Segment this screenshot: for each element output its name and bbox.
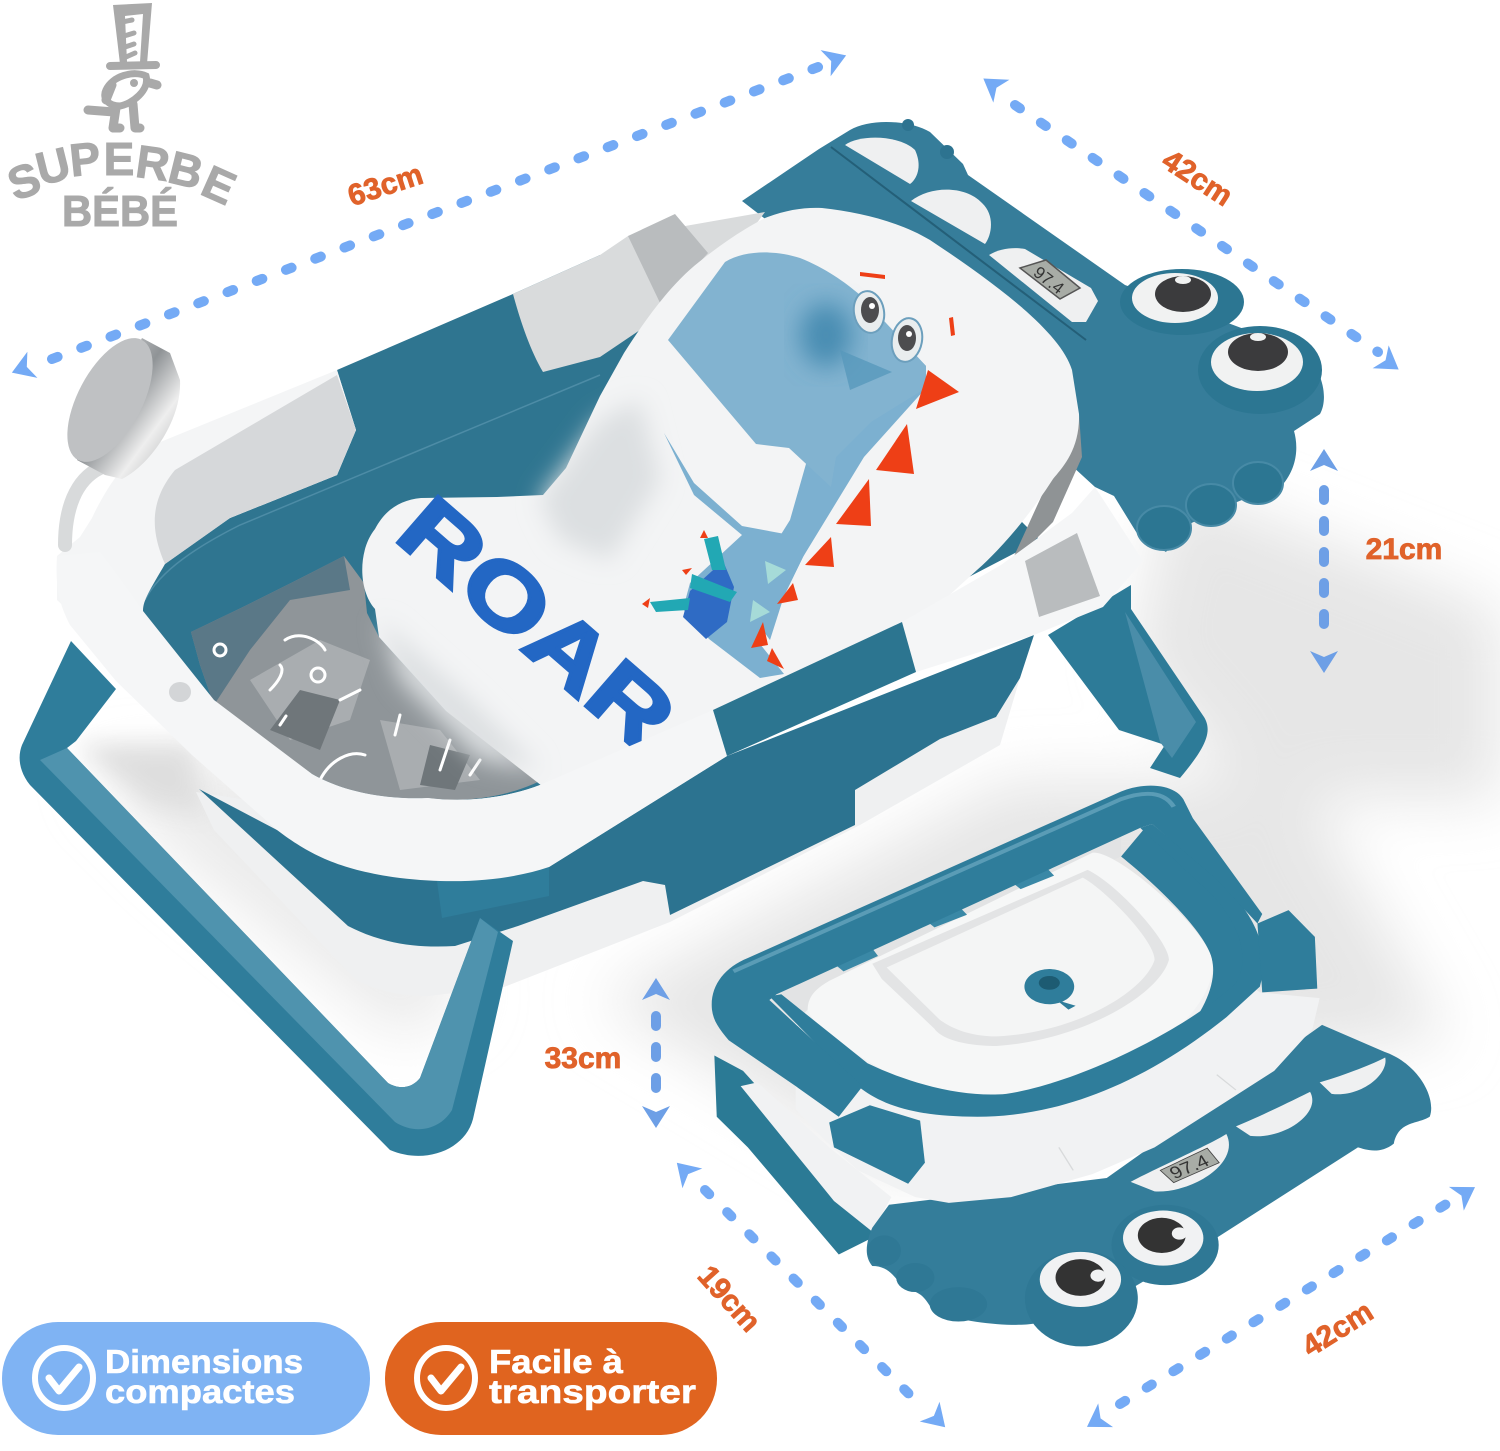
eye right: [1198, 326, 1322, 414]
dino eyes: [851, 289, 926, 364]
folded rear foot: [714, 1056, 877, 1255]
dimension arrow: length 63cm: [7, 42, 851, 386]
badge: Dimensions compactes: Dimensions: [105, 1343, 303, 1380]
panel bumps: [902, 119, 954, 159]
back rim grey patch: [513, 212, 765, 372]
label 19cm: 19cm: [691, 1259, 767, 1339]
logo: Superbe Bébé: [1, 3, 244, 236]
logo wordmark: U: [31, 137, 75, 195]
floor shadows: [90, 480, 1500, 1180]
badge: Facile à transporter: [385, 1322, 717, 1435]
panel white patches: [845, 138, 1098, 322]
seat mesh: [1010, 414, 1082, 565]
label 42cm bottom: 42cm: [1297, 1295, 1379, 1364]
left strap top: [628, 214, 708, 305]
folded tabs: [836, 868, 1054, 971]
logo wordmark: R: [133, 135, 173, 191]
tub rim front: [57, 487, 1143, 881]
logo wordmark: E: [194, 155, 244, 215]
logo wordmark: E: [104, 133, 134, 185]
check icon blue: [35, 1348, 93, 1408]
ROAR lettering: ROAR: [379, 478, 694, 770]
logo wordmark: B: [164, 141, 208, 199]
leg mount: [437, 867, 549, 918]
seat shading: [380, 400, 660, 770]
logo wordmark: S: [1, 151, 47, 211]
label 63cm: 63cm: [344, 158, 427, 213]
eye left: [1120, 269, 1244, 335]
folded inner wall: [1121, 828, 1251, 1040]
back leg of bath: [1048, 585, 1208, 778]
label 33cm: 33cm: [545, 1042, 621, 1075]
badge: Dimensions compactes: [2, 1322, 370, 1435]
rim teal segment: [713, 622, 916, 756]
logo wordmark: [1, 132, 244, 236]
dimension arrow: folded height 33cm: [642, 978, 670, 1128]
check icon orange: [417, 1348, 475, 1408]
label 21cm: 21cm: [1366, 533, 1442, 566]
badge: Facile à transporter: transporter: [489, 1373, 696, 1410]
folded crocodile plate: 97.4: [1166, 1152, 1214, 1183]
tub teal body: [199, 635, 1034, 947]
logo wordmark: P: [67, 132, 103, 186]
logo bird with top hat: [88, 3, 157, 128]
thermometer display: 97.4: [1030, 263, 1068, 298]
front leg frame: [20, 641, 549, 1156]
dimension arrow: folded depth 19cm: [667, 1153, 955, 1437]
badge: Dimensions compactes: compactes: [105, 1373, 295, 1410]
water: [191, 556, 540, 800]
dino belly and arms: [642, 530, 737, 639]
head panel: crocodile: [742, 119, 1324, 552]
folded clips: [829, 910, 1317, 1184]
folded U rim: [769, 824, 1263, 1117]
tub interior: [140, 212, 1040, 800]
label 42cm top: 42cm: [1156, 144, 1238, 213]
folded crocodile plate: [867, 1025, 1431, 1346]
folded frame: [712, 786, 1262, 1117]
dimension arrow: height 21cm: [1310, 449, 1338, 673]
shower head: [50, 325, 180, 545]
logo wordmark: BÉBÉ: [62, 186, 178, 236]
folded eyes: [1112, 1205, 1219, 1285]
rim strap: [1025, 533, 1100, 617]
dino pillow: [668, 252, 926, 487]
toes: [1137, 462, 1283, 550]
dino body: [664, 252, 926, 678]
dimension arrow: folded width 42cm: [1080, 1175, 1482, 1439]
rim drain dimple: [169, 682, 191, 702]
folded bath: [712, 786, 1431, 1346]
red spikes: [751, 272, 959, 669]
folded toes: [930, 1287, 987, 1322]
tub rim left and back: [57, 370, 356, 640]
bath seat: [362, 208, 1079, 800]
folded drain: [1024, 969, 1076, 1010]
thermometer display: [1020, 260, 1080, 299]
tub white base: [196, 678, 1020, 996]
folded white body: [796, 895, 1320, 1203]
dimension arrow: width 42cm: [975, 67, 1407, 381]
badge: Facile à transporter: Facile à: [489, 1343, 624, 1380]
folded lid: [808, 853, 1212, 1101]
